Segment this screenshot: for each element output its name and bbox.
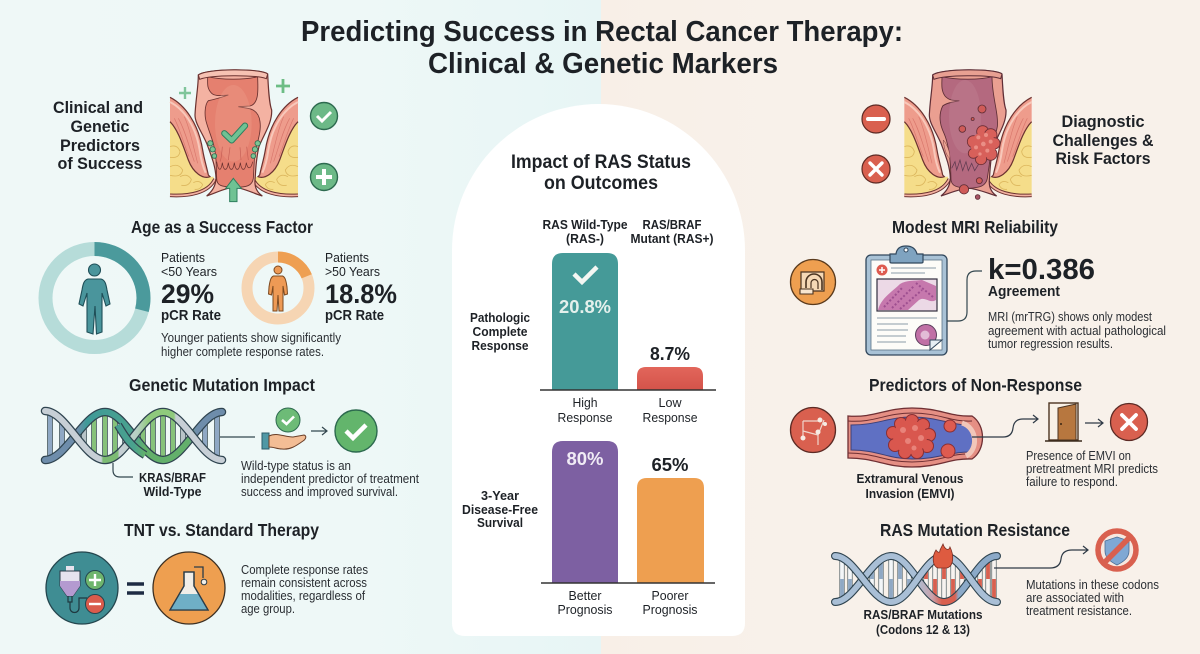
illustration: wild-type DNA helix	[45, 411, 222, 460]
donut chart: under 50, 29 percent	[46, 249, 144, 347]
polyps	[959, 105, 986, 199]
panel: predictors of non-response	[790, 375, 1158, 501]
patients under 50 stats	[161, 251, 221, 324]
panel: TNT vs standard therapy	[46, 520, 368, 624]
icon: node network circle	[790, 408, 836, 452]
arrow: DNA to resistance icon	[994, 546, 1088, 568]
heading: RAS impact: Impact of RAS Status	[511, 152, 691, 173]
arrow: door to cross	[1085, 419, 1103, 427]
column header: wild type	[542, 218, 628, 246]
bar chart: pathologic complete response	[540, 253, 716, 425]
bar: poorer prognosis 65 percent: 65%	[652, 455, 688, 475]
icon: teal person	[79, 264, 110, 334]
column header: mutant: Mutant (RAS+)	[630, 232, 714, 246]
axis label: better prognosis: Prognosis	[558, 602, 613, 617]
column header: wild type: RAS Wild-Type	[542, 218, 628, 232]
panel: impact of RAS status	[452, 104, 745, 636]
title	[301, 16, 903, 80]
icon: flask circle	[153, 552, 225, 624]
mutation label: (Codons 12 & 13)	[876, 622, 970, 637]
KRAS/BRAF label and connector: KRAS/BRAF	[139, 470, 206, 485]
illustration: clipboard report	[866, 246, 947, 355]
tumor in vein	[886, 414, 936, 458]
heading: RAS impact	[511, 152, 691, 194]
panel: genetic mutation impact	[45, 375, 419, 499]
background: right half	[601, 0, 1200, 654]
bar chart: 3-year disease-free survival	[541, 441, 715, 617]
row label: pathologic complete response	[470, 311, 530, 353]
patients over 50 stats: pCR Rate	[325, 307, 384, 324]
TNT caption: Complete response rates	[241, 563, 368, 577]
row label: pathologic complete response: Pathologic	[470, 311, 530, 325]
tumor mass	[967, 126, 1000, 165]
panel: RAS mutation resistance	[835, 520, 1159, 637]
stat: k=0.386 agreement: Agreement	[988, 284, 1060, 300]
icon: healing nodes	[208, 141, 260, 158]
illustration: healthy rectum anatomy	[170, 70, 298, 202]
KRAS/BRAF label and connector: Wild-Type	[144, 484, 202, 499]
axis label: poorer prognosis	[642, 588, 698, 617]
icon: small plus left	[179, 87, 191, 99]
non-response caption	[1026, 449, 1158, 489]
icon: big check circle	[335, 410, 377, 452]
panel: age as a success factor	[46, 217, 397, 359]
patients over 50 stats: 18.8%	[325, 279, 397, 309]
axis label: poorer prognosis: Poorer	[652, 588, 689, 603]
TNT caption: modalities, regardless of	[241, 589, 365, 603]
MRI caption: tumor regression results.	[988, 337, 1113, 351]
icon: MRI scanner circle	[790, 260, 836, 304]
genetic caption: Wild-type status is an	[241, 459, 351, 473]
age caption: Younger patients show significantly	[161, 331, 342, 345]
genetic caption: success and improved survival.	[241, 485, 398, 499]
heading: diagnostic challenges: Risk Factors	[1056, 149, 1150, 168]
illustration: vein with tumor	[848, 408, 982, 467]
heading: diagnostic challenges	[1052, 112, 1154, 168]
vein label	[856, 471, 964, 501]
row label: 3-year disease-free survival: Survival	[477, 516, 523, 530]
vein label: Extramural Venous	[856, 471, 964, 486]
column header: mutant: RAS/BRAF	[642, 218, 702, 232]
bar: better prognosis 80 percent: 80%	[566, 449, 604, 469]
resistance caption: Mutations in these codons	[1026, 578, 1159, 592]
bar: better prognosis 80 percent	[552, 441, 618, 583]
row label: 3-year disease-free survival: 3-Year	[481, 489, 519, 503]
illustration: diseased rectum anatomy	[904, 70, 1032, 199]
non-response caption: Presence of EMVI on	[1026, 449, 1131, 463]
title: Clinical & Genetic Markers	[428, 48, 778, 80]
white arch card	[452, 104, 745, 636]
heading: clinical and genetic predictors: Genetic	[70, 117, 130, 136]
heading: genetic: Genetic Mutation Impact	[129, 375, 315, 395]
non-response caption: pretreatment MRI predicts	[1026, 462, 1158, 476]
bar: mutant 8.7 percent	[637, 344, 703, 390]
axis label: low response: Low	[658, 395, 682, 410]
axis label: poorer prognosis: Prognosis	[642, 602, 698, 617]
row label: 3-year disease-free survival: Disease-Free	[462, 503, 538, 517]
connector line to hand	[220, 436, 255, 438]
bar: wild type 20.8 percent	[552, 253, 618, 390]
resistance caption: are associated with	[1026, 591, 1124, 605]
axis label: low response	[642, 395, 698, 425]
heading: age: Age as a Success Factor	[131, 217, 313, 237]
heading: RAS impact: on Outcomes	[544, 173, 658, 194]
non-response caption: failure to respond.	[1026, 475, 1118, 489]
bar: wild type 20.8 percent: 20.8%	[559, 297, 611, 317]
axis label: low response: Response	[642, 410, 698, 425]
bar: mutant 8.7 percent: 8.7%	[650, 344, 690, 364]
patients under 50 stats: <50 Years	[161, 265, 217, 279]
heading: TNT: TNT vs. Standard Therapy	[124, 520, 319, 540]
column header: mutant	[630, 218, 714, 246]
icon: hand holding check	[262, 408, 306, 449]
KRAS/BRAF label and connector	[113, 463, 206, 499]
heading: clinical and genetic predictors	[53, 98, 143, 173]
illustration: mutated DNA helix with flame	[835, 556, 997, 602]
icon: IV bag circle	[46, 552, 118, 624]
icon: orange person	[268, 266, 288, 311]
icon: flame mutation	[933, 544, 953, 568]
column header: wild type: (RAS-)	[566, 232, 604, 246]
bar: poorer prognosis 65 percent	[637, 455, 704, 583]
icon: prohibited shield	[1098, 531, 1136, 569]
row label: pathologic complete response: Response	[472, 339, 529, 353]
TNT caption: age group.	[241, 602, 295, 616]
mutation label	[864, 607, 982, 637]
heading: MRI: Modest MRI Reliability	[892, 217, 1058, 237]
patients over 50 stats: >50 Years	[325, 265, 380, 279]
mutation label: RAS/BRAF Mutations	[864, 607, 982, 622]
axis label: high response: High	[572, 395, 598, 410]
MRI caption	[988, 310, 1166, 351]
icon: minus circle	[862, 105, 890, 133]
icon: green check on rectum	[224, 126, 245, 140]
heading: diagnostic challenges: Diagnostic	[1062, 112, 1144, 131]
heading: RAS resistance: RAS Mutation Resistance	[880, 520, 1070, 540]
patients under 50 stats: 29%	[161, 279, 214, 309]
patients under 50 stats: Patients	[161, 251, 205, 265]
TNT caption	[241, 563, 368, 616]
genetic caption	[241, 459, 419, 499]
icon: green up arrow	[226, 178, 241, 202]
axis label: high response	[558, 395, 612, 425]
icon: check circle	[310, 102, 338, 130]
resistance caption	[1026, 578, 1159, 618]
genetic caption: independent predictor of treatment	[241, 472, 419, 486]
MRI caption: MRI (mrTRG) shows only modest	[988, 310, 1152, 324]
connector: clipboard to kappa	[947, 271, 982, 321]
background: left half	[0, 0, 601, 654]
vein label: Invasion (EMVI)	[866, 486, 954, 501]
arrow: vein to door	[972, 415, 1038, 437]
TNT caption: remain consistent across	[241, 576, 367, 590]
title: Predicting Success in Rectal Cancer Therapy:	[301, 16, 903, 48]
heading: diagnostic challenges: Challenges &	[1052, 131, 1154, 150]
patients over 50 stats	[325, 251, 397, 324]
heading: clinical and genetic predictors: of Success	[58, 154, 142, 173]
icon: equals sign	[127, 584, 144, 593]
heading: clinical and genetic predictors: Clinical and	[53, 98, 143, 117]
row label: 3-year disease-free survival	[462, 489, 538, 530]
icon: cross circle	[862, 155, 890, 183]
icon: red cross circle	[1110, 404, 1148, 440]
panel: diagnostic challenges	[862, 70, 1154, 199]
stat: k=0.386 agreement	[988, 254, 1095, 300]
donut chart: over 50, 18.8 percent	[247, 257, 309, 319]
axis label: high response: Response	[558, 410, 612, 425]
patients over 50 stats: Patients	[325, 251, 369, 265]
panel: modest MRI reliability	[790, 217, 1166, 355]
arrow: hand to result	[311, 427, 327, 435]
axis label: better prognosis	[558, 588, 613, 617]
resistance caption: treatment resistance.	[1026, 604, 1132, 618]
patients under 50 stats: pCR Rate	[161, 307, 221, 324]
icon: open door	[1045, 403, 1082, 441]
heading: non-response: Predictors of Non-Response	[869, 375, 1082, 395]
MRI caption: agreement with actual pathological	[988, 324, 1166, 338]
axis label: better prognosis: Better	[568, 588, 602, 603]
panel: clinical and genetic predictors	[53, 70, 338, 202]
age caption: higher complete response rates.	[161, 345, 324, 359]
icon: small plus right	[276, 79, 290, 93]
row label: pathologic complete response: Complete	[472, 325, 528, 339]
age caption	[161, 331, 342, 359]
stat: k=0.386 agreement: k=0.386	[988, 254, 1095, 286]
heading: clinical and genetic predictors: Predictors	[60, 136, 140, 155]
icon: plus circle	[310, 164, 338, 190]
